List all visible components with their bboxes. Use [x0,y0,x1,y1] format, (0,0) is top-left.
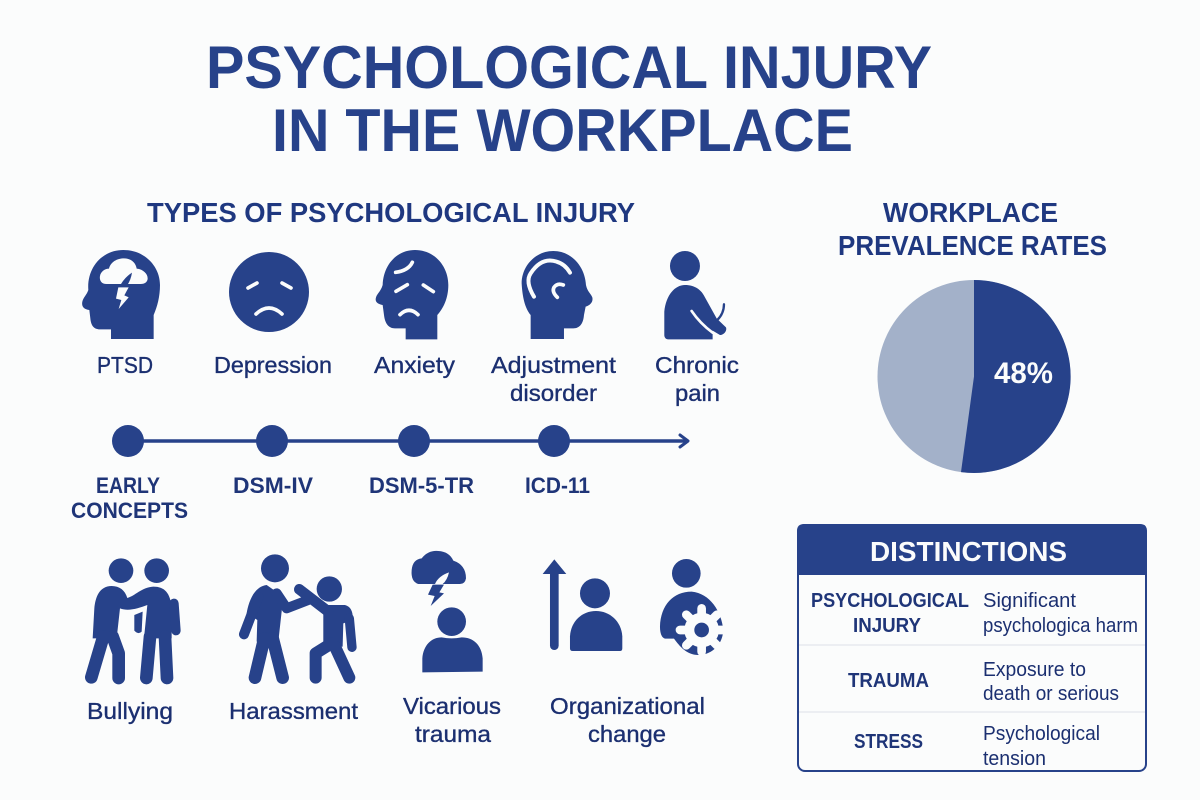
timeline labels [71,473,590,523]
row: trauma [848,659,1119,705]
pie chart [878,280,1071,473]
table header: DISTINCTIONS [870,536,1067,567]
timeline arrow [112,425,688,457]
label: bullying: Bullying [87,698,173,724]
label: adjustment disorder: Adjustment [491,352,617,378]
label: chronic pain: pain [675,380,720,406]
label: vicarious trauma: trauma [415,721,491,747]
label: vicarious trauma [403,693,501,747]
row: stress: tension [983,748,1046,770]
icon: sad face [229,252,309,332]
title [206,34,932,164]
label: adjustment disorder: disorder [510,380,597,406]
label: chronic pain [655,352,739,406]
heading: workplace prevalence rates: WORKPLACE [883,197,1058,228]
row: psychological injury: INJURY [853,615,922,637]
row: stress: Psychological [983,723,1100,745]
label: anxiety: Anxiety [374,352,456,378]
label: organizational change [550,693,705,747]
label: harassment: Harassment [229,698,359,724]
panel: distinctions table [797,524,1147,771]
timeline labels: CONCEPTS [71,498,188,523]
timeline labels: ICD-11 [525,473,590,498]
label: chronic pain: Chronic [655,352,739,378]
icon: adjustment disorder head [522,251,593,339]
row: stress [854,723,1100,770]
row: psychological injury: PSYCHOLOGICAL [811,590,969,612]
icon: anxiety head [376,250,448,339]
icon: bullying [91,558,176,678]
title: PSYCHOLOGICAL INJURY [206,34,932,101]
label: organizational change: Organizational [550,693,705,719]
timeline labels: DSM-IV [233,473,313,498]
row: trauma: TRAUMA [848,670,929,692]
label: adjustment disorder [491,352,617,406]
label: organizational change: change [588,721,666,747]
timeline labels: EARLY [96,473,160,498]
label: vicarious trauma: Vicarious [403,693,501,719]
icon: PTSD head with storm [82,250,160,339]
heading: workplace prevalence rates [838,197,1107,261]
pie chart: 48% [994,357,1053,390]
icon: chronic pain person [664,251,726,339]
row: psychological injury [811,590,1138,637]
icon: vicarious trauma [412,551,483,672]
table header [797,524,1147,575]
label: PTSD: PTSD [97,352,153,378]
icon: organizational change [543,559,723,655]
row: trauma: Exposure to [983,659,1086,681]
heading: types of psychological injury: TYPES OF PSYCHOLOGICAL INJURY [147,197,635,228]
row: psychological injury: psychologica harm [983,615,1138,637]
label: depression: Depression [214,352,332,378]
row: trauma: death or serious [983,683,1119,705]
icon: harassment [244,554,353,678]
row: psychological injury: Significant [983,590,1076,612]
title: IN THE WORKPLACE [272,97,853,164]
heading: workplace prevalence rates: PREVALENCE RATES [838,230,1107,261]
row: stress: STRESS [854,731,923,753]
timeline labels: DSM-5-TR [369,473,474,498]
